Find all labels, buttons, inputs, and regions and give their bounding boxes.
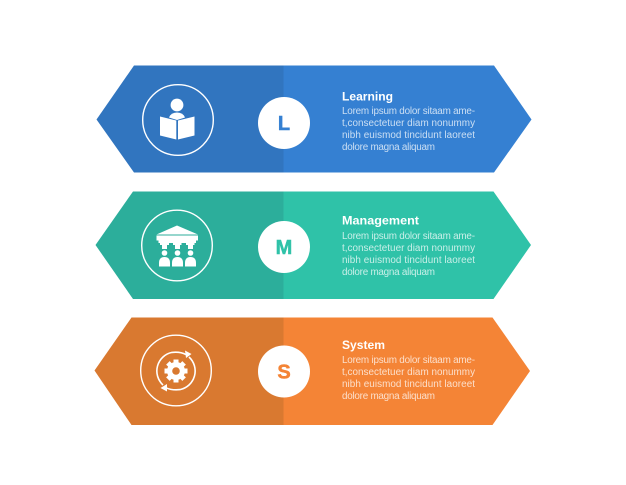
text block: System: System bbox=[342, 338, 385, 352]
text block: System: Lorem ipsum dolor sitaam ame- bbox=[342, 355, 475, 366]
panel: System bbox=[94, 318, 530, 425]
text block: Learning: dolore magna aliquam bbox=[342, 142, 435, 153]
text block: Management: Management bbox=[342, 214, 419, 228]
left band: System bbox=[94, 318, 284, 425]
left band: Management bbox=[96, 192, 284, 299]
letter badge: S: S bbox=[277, 362, 291, 384]
text block: System bbox=[342, 338, 475, 402]
letter badge: M: M bbox=[276, 237, 292, 259]
text block: System: nibh euismod tincidunt laoreet bbox=[342, 379, 475, 390]
letter badge: S bbox=[258, 346, 310, 398]
text block: Learning: Lorem ipsum dolor sitaam ame- bbox=[342, 106, 475, 117]
text block: Management: t,consectetuer diam nonummy bbox=[342, 243, 475, 254]
right band: Learning bbox=[284, 66, 532, 172]
icon: reader with open book bbox=[143, 85, 213, 155]
text block: Learning bbox=[342, 90, 475, 153]
letter badge: L: L bbox=[278, 113, 290, 135]
right band: System bbox=[284, 318, 530, 425]
text block: Learning: nibh euismod tincidunt laoreet bbox=[342, 130, 475, 141]
text block: Learning: t,consectetuer diam nonummy bbox=[342, 118, 475, 129]
text block: Learning: Learning bbox=[342, 90, 393, 104]
letter badge: L bbox=[258, 97, 310, 149]
right band: Management bbox=[284, 192, 531, 299]
icon: gear with cycle arrows bbox=[141, 335, 211, 406]
text block: Management: dolore magna aliquam bbox=[342, 267, 435, 278]
text block: System: dolore magna aliquam bbox=[342, 391, 435, 402]
text block: Management: nibh euismod tincidunt laoreet bbox=[342, 255, 475, 266]
panel: Management bbox=[96, 192, 531, 299]
left band: Learning bbox=[96, 66, 284, 172]
icon: institution with people bbox=[142, 210, 212, 281]
text block: System: t,consectetuer diam nonummy bbox=[342, 367, 475, 378]
text block: Management: Lorem ipsum dolor sitaam ame- bbox=[342, 231, 475, 242]
text block: Management bbox=[342, 214, 475, 278]
letter badge: M bbox=[258, 221, 310, 273]
panel: Learning bbox=[96, 66, 532, 172]
